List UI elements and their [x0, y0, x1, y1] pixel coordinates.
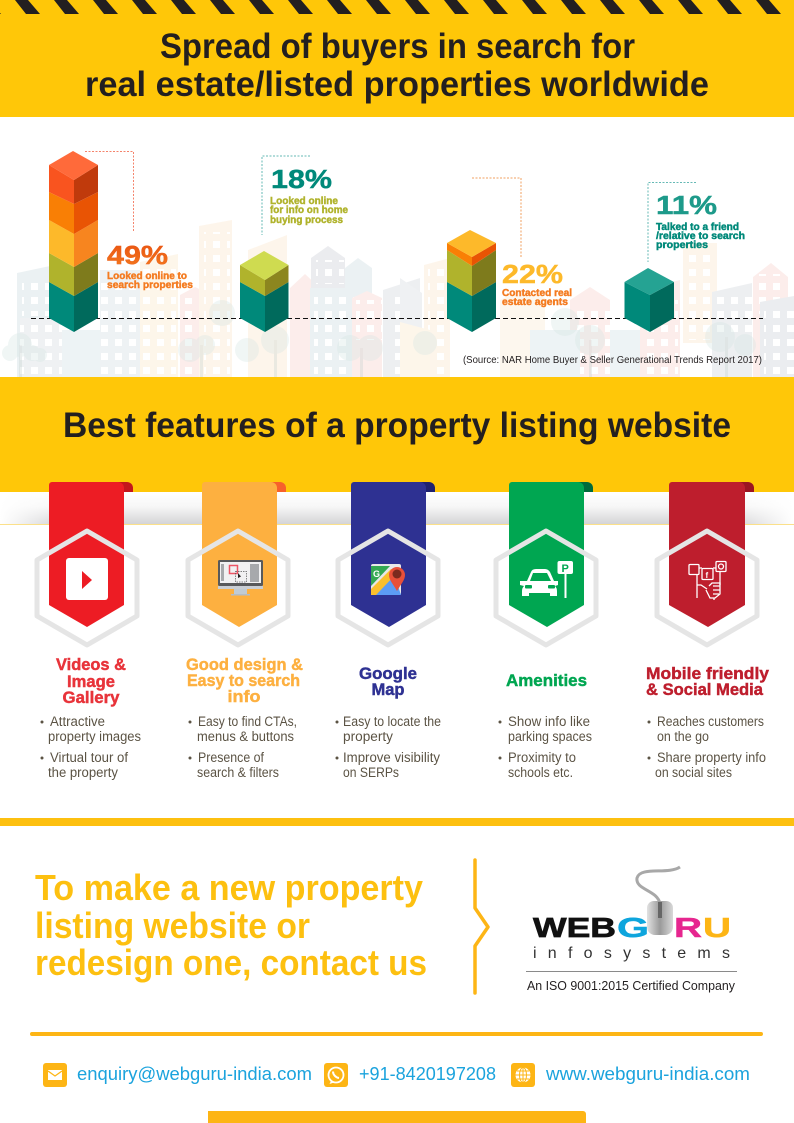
feature bullets: the property: [48, 765, 118, 780]
city skyline background: [17, 220, 794, 377]
feature heading: Good design &: [186, 655, 303, 674]
feature bullets: on the go: [657, 729, 709, 744]
feature bullets: Presence of: [198, 750, 264, 765]
feature bullets: Easy to find CTAs,: [198, 714, 297, 729]
feature: mobile friendly and social media: [646, 482, 770, 780]
feature bullets: Virtual tour of: [50, 750, 128, 765]
stat 18 percent bar: [240, 251, 288, 332]
stat 22 percent label: Contacted real: [502, 287, 572, 299]
company logo: WEB: [533, 912, 616, 943]
feature bullets: property images: [48, 729, 141, 744]
contact: website: www.webguru-india.com: [545, 1064, 750, 1084]
feature: videos and image gallery: [37, 482, 141, 780]
feature bullets: Reaches customers: [657, 714, 764, 729]
chevron separator: [475, 860, 488, 993]
feature heading: Mobile friendly: [646, 664, 770, 683]
stat 22 percent label: estate agents: [502, 296, 568, 308]
feature bullets: [188, 714, 297, 780]
icon: google maps: G: [373, 569, 380, 579]
icon: social media on phone: [689, 562, 726, 600]
feature bullets: [648, 714, 766, 780]
feature heading: Amenities: [506, 671, 587, 690]
company logo: infosystems: [533, 945, 730, 962]
company logo: [526, 867, 737, 993]
stat 49 percent label: [85, 152, 193, 291]
feature bullets: [40, 714, 141, 780]
feature bullets: Share property info: [657, 750, 766, 765]
stat 49 percent label: 49%: [107, 240, 168, 270]
feature bullets: Improve visibility: [343, 750, 440, 765]
title: real estate/listed properties worldwide: [85, 65, 709, 104]
feature bullets: menus & buttons: [197, 729, 294, 744]
stat 49 percent bar: [49, 151, 98, 332]
bottom tab: [208, 1111, 586, 1123]
feature heading: [359, 664, 417, 699]
feature bullets: Easy to locate the: [343, 714, 441, 729]
icon: car and parking sign: P: [562, 563, 569, 575]
stat 18 percent label: buying process: [270, 214, 343, 226]
feature heading: Gallery: [62, 688, 120, 707]
feature bullets: on SERPs: [343, 765, 399, 780]
feature heading: [56, 655, 126, 707]
call to action: [35, 867, 427, 983]
divider: [0, 818, 794, 826]
icon: play video: [66, 558, 108, 600]
feature bullets: Show info like: [508, 714, 590, 729]
header banner: [0, 0, 794, 117]
call to action: redesign one, contact us: [35, 942, 427, 983]
stat 18 percent label: for info on home: [270, 204, 348, 216]
feature bullets: search & filters: [197, 765, 279, 780]
icon: social media on phone: f: [706, 571, 708, 580]
icon: car and parking sign: [520, 561, 573, 598]
contact: website: [511, 1063, 750, 1087]
icon: google maps: [371, 564, 405, 595]
title: [85, 27, 709, 104]
stat 11 percent label: properties: [656, 239, 708, 251]
stat 49 percent label: Looked online to: [107, 270, 187, 282]
stat 11 percent label: 11%: [656, 190, 717, 220]
feature bullets: [498, 714, 592, 780]
feature heading: Easy to search: [187, 671, 300, 690]
icon: monitor wireframe: [218, 560, 263, 596]
feature bullets: [336, 714, 441, 780]
stat 18 percent label: [262, 156, 348, 235]
feature heading: & Social Media: [646, 680, 764, 699]
feature bullets: schools etc.: [508, 765, 573, 780]
feature: amenities: [496, 482, 596, 780]
company logo: R: [674, 912, 702, 943]
feature: google map: [336, 482, 441, 780]
stat 18 percent label: Looked online: [270, 195, 338, 207]
feature heading: Map: [372, 680, 404, 699]
contact: phone: +91-8420197208: [359, 1064, 496, 1084]
panel: buyer statistics: [2, 151, 794, 377]
stat 11 percent label: /relative to search: [656, 230, 745, 242]
company logo: An ISO 9001:2015 Certified Company: [527, 978, 735, 993]
stat 11 percent label: Talked to a friend: [656, 221, 739, 233]
stat 49 percent label: search properties: [107, 279, 193, 291]
company logo: G: [617, 912, 649, 943]
panel: best features heading band: [0, 377, 794, 525]
footer rule: [30, 1032, 763, 1036]
feature: good design and easy search: [186, 482, 303, 780]
section heading: Best features of a property listing website: [63, 406, 731, 445]
feature heading: info: [228, 687, 260, 706]
stat 22 percent bar: [447, 230, 496, 332]
feature heading: Google: [359, 664, 417, 683]
feature heading: [186, 655, 303, 706]
trees: [2, 300, 756, 377]
contact: email: enquiry@webguru-india.com: [77, 1064, 312, 1084]
stat 22 percent label: 22%: [502, 259, 563, 289]
feature bullets: Proximity to: [508, 750, 576, 765]
feature heading: [646, 664, 770, 699]
feature heading: Videos &: [56, 655, 126, 674]
call to action: listing website or: [35, 905, 310, 946]
feature bullets: on social sites: [655, 765, 732, 780]
title: Spread of buyers in search for: [160, 27, 635, 66]
baseline dashed: [31, 318, 763, 320]
stat 11 percent label: [648, 182, 745, 262]
stat 18 percent label: 18%: [271, 164, 332, 194]
feature bullets: parking spaces: [508, 729, 592, 744]
company logo: U: [703, 912, 731, 943]
feature bullets: Attractive: [50, 714, 105, 729]
feature heading: Image: [67, 672, 115, 691]
stat 11 percent bar: [624, 268, 674, 332]
contact: phone: [324, 1063, 496, 1087]
stat 22 percent label: [472, 178, 572, 308]
source note: (Source: NAR Home Buyer & Seller Generational Trends Report 2017): [463, 354, 762, 366]
mouse cord and body: [637, 867, 680, 935]
call to action: To make a new property: [35, 867, 423, 908]
feature bullets: property: [343, 729, 393, 744]
